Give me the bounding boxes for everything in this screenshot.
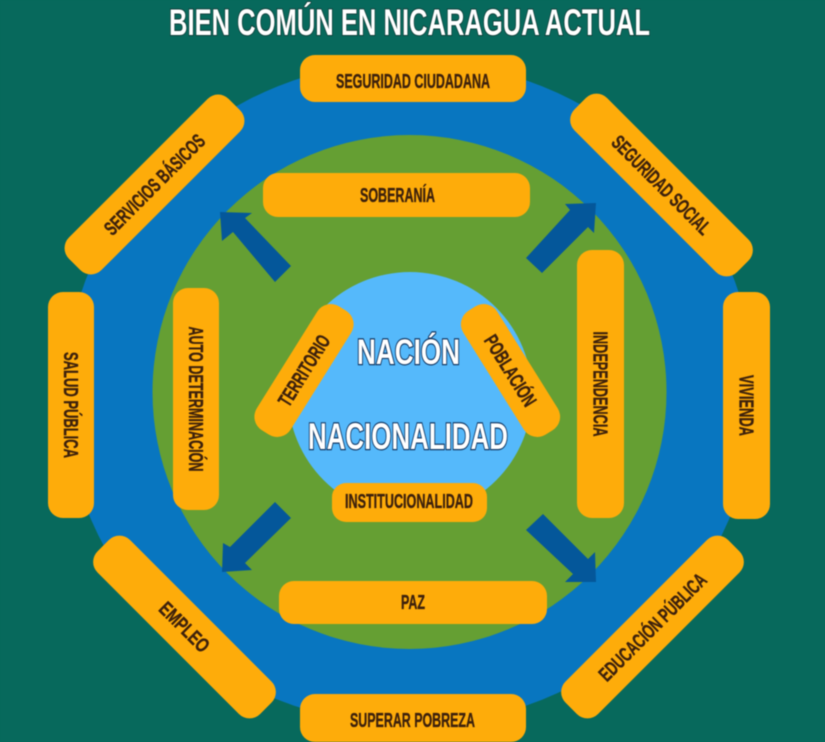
pill: población: POBLACIÓN: [479, 330, 542, 411]
arrow: top right: [526, 203, 596, 273]
pill: paz: PAZ: [401, 592, 425, 614]
pill: empleo: EMPLEO: [154, 598, 213, 657]
pill: superar pobreza: [300, 694, 526, 742]
pill: soberanía: SOBERANÍA: [360, 184, 435, 207]
pill: seguridad ciudadana: [300, 55, 526, 102]
pill: vivienda: VIVIENDA: [734, 375, 756, 436]
pill: educación pública: EDUCACIÓN PÚBLICA: [593, 568, 712, 686]
outer blue ellipse: [65, 61, 755, 725]
pill: auto determinación: [173, 288, 219, 510]
pill: salud pública: SALUD PÚBLICA: [59, 352, 83, 458]
arrow: bottom right: [526, 514, 596, 582]
pill: institucionalidad: INSTITUCIONALIDAD: [345, 491, 473, 513]
pill: superar pobreza: SUPERAR POBREZA: [350, 710, 475, 732]
center text: nacionalidad: NACIONALIDAD: [308, 416, 508, 457]
pill: territorio: [248, 298, 360, 443]
pill: población: [455, 298, 566, 443]
pill: auto determinación: AUTO DETERMINACIÓN: [184, 326, 208, 472]
pill: empleo: [87, 529, 282, 725]
pill: territorio: TERRITORIO: [274, 331, 335, 411]
pill: servicios básicos: [58, 88, 251, 281]
pill: soberanía: [263, 173, 530, 217]
center text: nación: NACIÓN: [357, 332, 460, 372]
pill: independencia: [577, 250, 624, 518]
pill: seguridad social: [564, 87, 759, 283]
pill: institucionalidad: [332, 483, 487, 522]
pill: independencia: INDEPENDENCIA: [588, 332, 610, 436]
arrow: top left: [220, 212, 291, 282]
pill: vivienda: [723, 292, 770, 519]
pill: educación pública: [555, 529, 750, 725]
middle green circle: [152, 135, 666, 649]
pill: salud pública: [48, 292, 94, 518]
pill: seguridad ciudadana: SEGURIDAD CIUDADANA: [336, 71, 490, 93]
pill: seguridad social: SEGURIDAD SOCIAL: [607, 132, 715, 240]
inner light blue circle: [288, 272, 532, 516]
pill: servicios básicos: SERVICIOS BÁSICOS: [100, 130, 210, 240]
arrow: bottom left: [222, 502, 291, 572]
pill: paz: [279, 581, 547, 624]
